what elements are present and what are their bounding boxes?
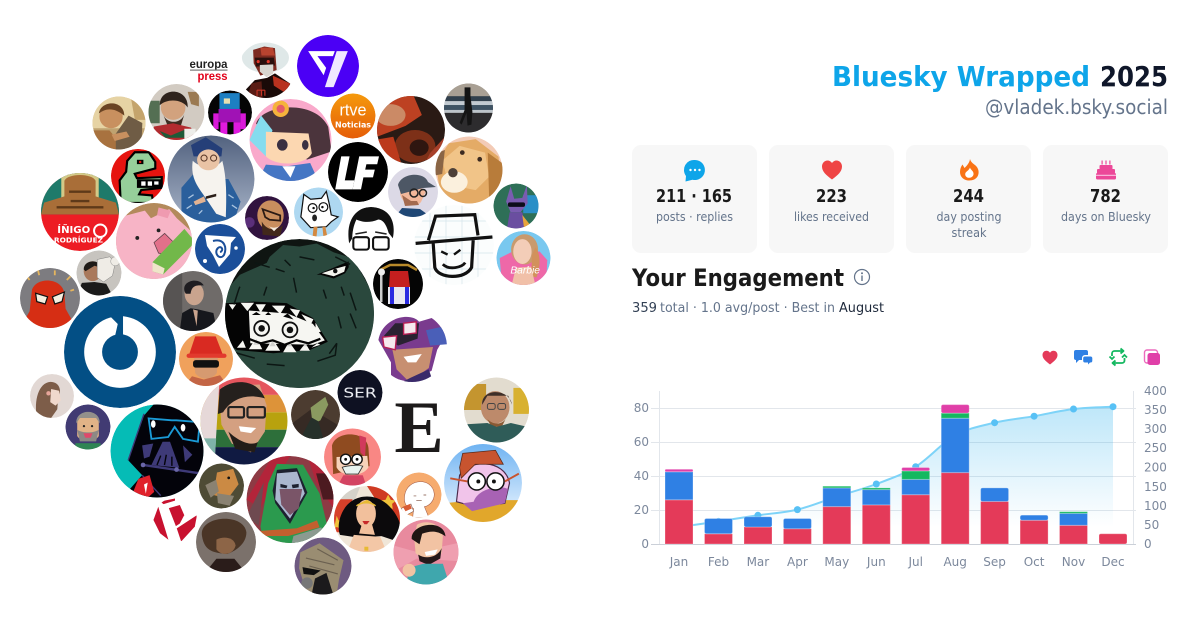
gridlines [651, 391, 1136, 544]
engagement summary: August [839, 300, 884, 316]
y axis right: 150 [1144, 480, 1167, 494]
bar: Feb [704, 518, 732, 544]
avatar: beach silhouette [444, 84, 493, 132]
avatar: thing with inigo rodriguez: ÍÑIGO [57, 223, 91, 236]
icon: cake [1096, 160, 1116, 180]
avatar: europa press logo: europa [190, 57, 228, 71]
panel: likes received [769, 145, 894, 253]
avatar: spyro [494, 184, 538, 228]
y axis right [1144, 384, 1167, 551]
y axis left: 0 [641, 537, 649, 551]
avatar: rtve noticias: Noticias [335, 121, 371, 130]
cumulative points [676, 403, 1116, 530]
avatar: dark forest figure [291, 390, 340, 439]
icon: likes heart [1042, 351, 1058, 364]
stat label: likes received [794, 210, 869, 224]
avatar: blue swirl logo [195, 224, 245, 274]
panel: days on bluesky [1043, 145, 1168, 253]
avatar: spiderman [20, 268, 80, 328]
icon: repost arrows [1110, 348, 1127, 366]
avatar: spider-woman purple [377, 312, 447, 382]
avatar: blurred red face [376, 96, 445, 164]
x axis months: Dec [1101, 555, 1125, 569]
avatar: kid with cat [92, 96, 146, 150]
avatar: SER logo: SER [343, 385, 377, 401]
avatar: chibi on pink [250, 99, 332, 181]
stat label: days on Bluesky [1061, 210, 1151, 224]
avatar: barbie girl [496, 231, 550, 285]
avatar: courage pink creature [444, 444, 522, 522]
icon: quote squares [1144, 350, 1160, 365]
stat value: 223 [816, 186, 847, 207]
stat label [936, 210, 1002, 240]
x axis months: Feb [708, 555, 729, 569]
avatar: woman in black [163, 271, 223, 331]
avatar: SER logo [338, 370, 382, 415]
engagement summary: total · 1.0 avg/post · Best in [660, 300, 835, 316]
engagement heading: Your Engagement [631, 264, 844, 292]
y axis right: 400 [1144, 384, 1167, 398]
avatar: rtve noticias [330, 94, 376, 138]
avatar: red demon pixel [373, 259, 423, 309]
avatar: cartoon man on pink [394, 520, 458, 584]
avatar cluster [20, 35, 550, 594]
avatar: P logo [153, 498, 197, 542]
y axis left [634, 401, 649, 551]
chart: monthly engagement [634, 384, 1167, 569]
avatar: man in christmas sweater [148, 84, 204, 140]
y axis right: 300 [1144, 422, 1167, 436]
stat label: day posting [936, 210, 1002, 224]
avatar: orange creature [199, 464, 244, 508]
avatar: smiling man with glasses [244, 196, 289, 240]
x axis months: Aug [943, 555, 967, 569]
panel: posts and replies [632, 145, 757, 253]
y axis right: 250 [1144, 441, 1167, 455]
icon: info [854, 270, 870, 284]
avatar: man and rabbit [76, 250, 122, 296]
x axis months: Jan [669, 555, 688, 569]
bar: Nov [1060, 512, 1088, 544]
y axis left: 20 [634, 503, 649, 517]
y axis left: 80 [634, 401, 649, 415]
x axis months: Nov [1062, 555, 1085, 569]
engagement summary: 359 [632, 300, 657, 316]
stat value: 211 · 165 [656, 186, 732, 207]
avatar: golden dog [436, 136, 502, 204]
avatar: daredevil [242, 42, 290, 98]
avatar: godzilla [222, 239, 377, 391]
y axis left: 40 [634, 469, 649, 483]
avatar: doctor doom [246, 456, 334, 543]
stat value: 244 [953, 186, 984, 207]
y axis right: 200 [1144, 460, 1167, 474]
x axis months: Mar [747, 555, 769, 569]
avatar: pink pig with book [116, 203, 192, 279]
avatar: man rainbow [200, 378, 288, 464]
avatar: devo red hat [179, 332, 233, 386]
avatar: darth vader [110, 403, 205, 499]
stacked bars [665, 405, 1127, 544]
x axis months: Sep [983, 555, 1006, 569]
bar: Mar [744, 517, 772, 544]
avatar: white chicken [294, 188, 343, 236]
avatar: mabel [324, 428, 381, 486]
avatar: man with cap [388, 167, 438, 217]
title: Bluesky Wrapped [832, 60, 1090, 93]
y axis right: 0 [1144, 537, 1152, 551]
y axis left: 60 [634, 435, 649, 449]
bar: Jul [902, 468, 930, 544]
bar: Oct [1020, 515, 1048, 544]
stat value: 782 [1090, 186, 1121, 207]
avatar: pixel dino [111, 149, 165, 203]
avatar: LF logo [328, 142, 388, 202]
avatar: hat doodle [414, 205, 494, 285]
icon: replies chat [1074, 350, 1092, 364]
bar: Jan [665, 469, 693, 544]
x axis months: Jul [907, 555, 923, 569]
handle: @vladek.bsky.social [985, 95, 1168, 119]
bar: Aug [941, 405, 969, 544]
avatar: blue donut logo [64, 296, 176, 408]
chart legend [1042, 348, 1160, 366]
bar: Dec [1099, 534, 1127, 544]
bar: Apr [783, 518, 811, 544]
cumulative line [679, 407, 1113, 527]
panel: day posting streak [906, 145, 1031, 253]
avatar: E logo [377, 384, 461, 469]
title: 2025 [1100, 60, 1168, 93]
avatar: E logo: E [394, 387, 444, 469]
x axis months: Jun [866, 555, 886, 569]
avatar: europa press logo: press [198, 71, 228, 83]
avatar: man in museum [464, 378, 529, 442]
bar: Jun [862, 488, 890, 544]
bar: May [823, 486, 851, 544]
avatar: anime girl [30, 374, 74, 418]
avatar: white sketch [396, 472, 442, 518]
icon: heart [822, 160, 842, 180]
icon: speech bubble [684, 160, 705, 182]
x axis months: May [824, 555, 849, 569]
avatar: wizard [168, 136, 254, 222]
avatar: thing with inigo rodriguez [41, 173, 119, 251]
avatar: europa press logo [190, 57, 228, 83]
avatar: purple V logo [297, 35, 359, 97]
stat label: streak [952, 226, 987, 240]
avatar: barbie girl: Barbie [510, 266, 540, 277]
y axis right: 50 [1144, 518, 1159, 532]
avatar: rembrandt portrait [196, 512, 256, 572]
avatar: black-white glasses drawing [348, 207, 394, 251]
avatar: thing with inigo rodriguez: RODRÍGUEZ [54, 235, 104, 244]
avatar: gray beard [66, 404, 110, 450]
y axis right: 350 [1144, 403, 1167, 417]
avatar: pixel robot [208, 90, 252, 134]
icon: flame [960, 159, 979, 180]
avatar: rtve noticias: rtve [340, 102, 366, 120]
avatar: mummy [294, 538, 352, 594]
bar: Sep [981, 488, 1009, 544]
x axis months: Apr [787, 555, 808, 569]
y axis right: 100 [1144, 499, 1167, 513]
stat label: posts · replies [656, 210, 733, 224]
avatar: wonder woman [334, 486, 400, 552]
x axis months: Oct [1024, 555, 1045, 569]
x axis months [669, 555, 1125, 569]
cumulative area [679, 407, 1113, 527]
